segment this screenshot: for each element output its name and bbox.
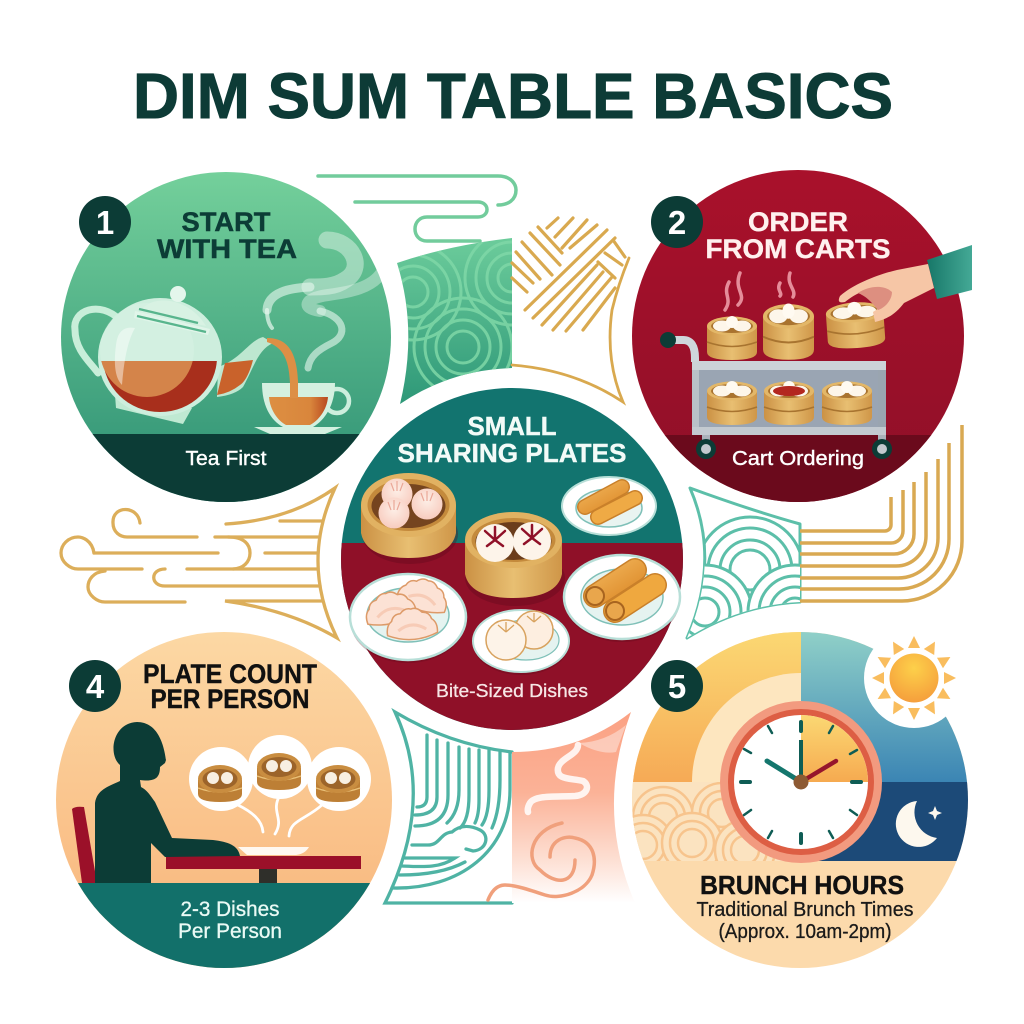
- icon: moon and star: [896, 801, 942, 847]
- badge 5: [651, 660, 703, 712]
- heading: WITH TEA: [157, 234, 297, 264]
- icon: sun: [864, 628, 964, 728]
- heading: FROM CARTS: [706, 234, 890, 264]
- heading: [398, 411, 626, 468]
- icon: table: [166, 847, 361, 883]
- title: DIM SUM TABLE BASICS: [133, 60, 893, 132]
- icon: teapot: [75, 286, 273, 424]
- decoration: teal arc tile right: [686, 486, 802, 640]
- badge 5: 5: [668, 668, 686, 705]
- panel: 2 order from carts: [632, 170, 972, 505]
- decoration: green swoosh lines top: [318, 176, 516, 241]
- icon: person silhouette: [95, 722, 240, 883]
- icon: tea cup: [254, 383, 349, 434]
- decoration: green patterned tile: [397, 238, 512, 404]
- icon: char siu bao steamer: [465, 512, 565, 606]
- badge 2: [651, 196, 703, 248]
- icon: cart: [660, 332, 892, 459]
- badge 4: 4: [86, 668, 105, 705]
- icon: steamed bun plate: [473, 610, 569, 675]
- panel: 5 brunch hours: [613, 628, 969, 968]
- caption: Per Person: [178, 920, 282, 943]
- icon: dumpling plate: [350, 573, 466, 663]
- decoration: gold cloud lines left: [61, 488, 337, 638]
- badge 2: 2: [668, 204, 686, 241]
- caption: [178, 898, 282, 943]
- panel: 1 start with tea: [60, 172, 392, 504]
- panel: 4 plate count per person: [56, 632, 392, 973]
- caption: Cart Ordering: [732, 448, 864, 470]
- icon: chair: [72, 807, 97, 883]
- heading: PLATE COUNT: [143, 659, 317, 689]
- icon: top right spring roll plate: [562, 477, 656, 535]
- caption: Bite-Sized Dishes: [436, 681, 588, 701]
- badge 4: [69, 660, 121, 712]
- caption: 2-3 Dishes: [180, 898, 280, 921]
- heading: BRUNCH HOURS: [700, 870, 904, 900]
- icon: clock: [720, 701, 882, 863]
- detail text: (Approx. 10am-2pm): [718, 921, 892, 943]
- icon: hand and sleeve: [839, 245, 972, 322]
- icon: large spring roll plate: [564, 555, 680, 642]
- decoration: teal line tile bottom: [385, 712, 512, 903]
- icon: steamers on cart top: [707, 300, 886, 360]
- icon: dish thought bubbles: [189, 735, 371, 836]
- heading: SHARING PLATES: [398, 438, 626, 468]
- heading: [706, 207, 890, 264]
- detail text: [696, 899, 914, 943]
- decoration: salmon steam tile bottom: [488, 712, 635, 903]
- icon: pouring tea: [267, 338, 298, 398]
- wave pattern: [632, 782, 775, 861]
- heading: PER PERSON: [150, 684, 310, 714]
- heading: SMALL: [468, 411, 557, 441]
- icon: steam wisps: [725, 273, 794, 310]
- detail text: Traditional Brunch Times: [696, 899, 914, 921]
- badge 1: [79, 196, 131, 248]
- heading: ORDER: [748, 207, 848, 237]
- icon: steamers on cart shelf: [707, 381, 872, 425]
- icon: steam: [267, 240, 382, 368]
- decoration: gold woven stripes: [512, 218, 629, 402]
- badge 1: 1: [96, 204, 114, 241]
- panel: small sharing plates: [341, 388, 683, 733]
- decoration: gold corner lines right: [800, 425, 962, 601]
- heading: START: [182, 207, 271, 237]
- heading: [157, 207, 297, 264]
- icon: har gow steamer: [361, 473, 458, 564]
- caption: Tea First: [186, 448, 267, 470]
- heading: [143, 659, 317, 714]
